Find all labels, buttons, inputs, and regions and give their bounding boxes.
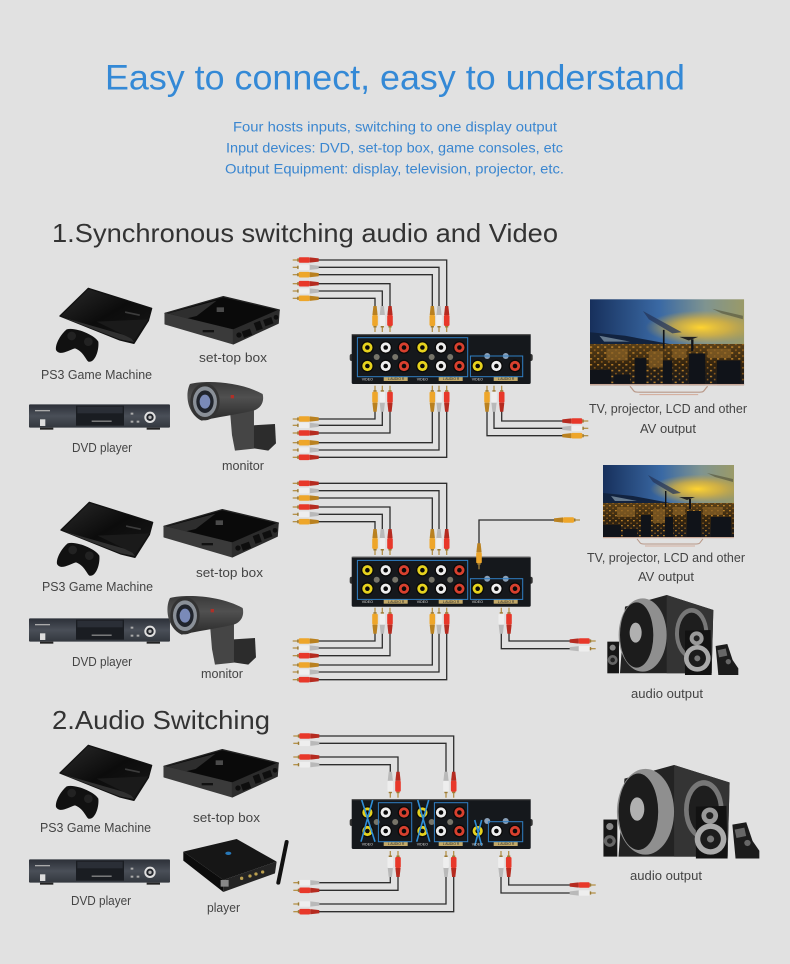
intro text	[225, 118, 564, 176]
switcher box 2: L AUDIO R	[443, 600, 460, 604]
switcher box 1: L AUDIO R	[388, 377, 405, 381]
device labels: player	[207, 900, 241, 915]
switcher box 3	[350, 799, 533, 849]
icon: speakers	[607, 595, 738, 675]
switcher box 2: VIDEO	[417, 600, 428, 604]
heading: section 2: 2.Audio Switching	[52, 705, 270, 735]
output label 2: TV, projector, LCD and other	[587, 550, 746, 565]
output: speakers 2	[607, 595, 738, 701]
output: TV 2	[587, 465, 746, 584]
input devices 2	[29, 502, 278, 681]
heading: section 1: 1.Synchronous switching audio and Video	[52, 218, 558, 248]
switcher box 2: L AUDIO R	[388, 600, 405, 604]
output: speakers 3	[603, 765, 759, 883]
label: audio output: audio output	[631, 686, 703, 701]
RCA plugs 3	[293, 733, 596, 914]
icon: monitor camera	[187, 382, 276, 451]
icon: PS3 game machine	[57, 502, 153, 576]
icon: television	[590, 299, 744, 395]
device labels: DVD player	[72, 440, 133, 455]
switcher box 3: L AUDIO R	[443, 842, 460, 846]
switcher box 3: VIDEO	[362, 842, 373, 846]
panel: diagram 3 audio switching	[29, 733, 759, 915]
device labels: monitor	[222, 458, 265, 473]
switcher box 3: L AUDIO R	[498, 842, 515, 846]
device labels: PS3 Game Machine	[41, 367, 152, 382]
RCA plugs 2	[293, 480, 596, 682]
switcher box 1: L AUDIO R	[498, 377, 515, 381]
output label 1: TV, projector, LCD and other	[589, 401, 748, 416]
label: audio output: audio output	[630, 868, 702, 883]
device labels: PS3 Game Machine	[40, 820, 151, 835]
icon: DVD player	[29, 618, 170, 644]
icon: media player	[183, 839, 287, 892]
icon: speakers	[603, 765, 759, 859]
device labels: DVD player	[72, 654, 133, 669]
switcher box 2	[350, 557, 533, 607]
cables 2	[316, 483, 572, 680]
title: Easy to connect, easy to understand	[105, 58, 685, 98]
device labels	[42, 565, 264, 681]
switcher box 1: VIDEO	[472, 378, 483, 382]
switcher box 1: VIDEO	[362, 378, 373, 382]
icon: set-top box	[164, 510, 278, 557]
switcher box 3: VIDEO	[417, 842, 428, 846]
output label 1	[589, 401, 748, 436]
output label 2	[587, 550, 746, 584]
device labels: set-top box	[196, 565, 264, 580]
icon: PS3 game machine	[56, 288, 152, 362]
switcher box 3: VIDEO	[472, 842, 483, 846]
intro text: Four hosts inputs, switching to one display output	[233, 118, 557, 134]
output: TV 1	[589, 299, 748, 436]
icon: television	[603, 465, 734, 546]
switcher box 1	[350, 334, 533, 384]
device labels	[41, 350, 268, 473]
device labels: set-top box	[199, 350, 268, 365]
output label 2: AV output	[638, 569, 694, 584]
device labels: set-top box	[193, 810, 261, 825]
device labels: PS3 Game Machine	[42, 579, 153, 594]
switcher box 1: L AUDIO R	[443, 377, 460, 381]
icon: PS3 game machine	[56, 745, 152, 819]
input devices 1	[29, 288, 279, 473]
icon: set-top box	[164, 750, 278, 797]
intro text: Output Equipment: display, television, projector, etc.	[225, 160, 564, 176]
output label 1: AV output	[640, 421, 696, 436]
icon: DVD player	[29, 859, 170, 885]
icon: set-top box	[165, 297, 279, 344]
device labels	[40, 810, 261, 915]
switcher box 1: VIDEO	[417, 378, 428, 382]
cables 3	[317, 736, 572, 912]
device labels: monitor	[201, 666, 244, 681]
icon: monitor camera	[167, 596, 256, 665]
switcher box 3: L AUDIO R	[388, 842, 405, 846]
switcher box 2: VIDEO	[362, 600, 373, 604]
cables 1	[316, 260, 565, 457]
input devices 3	[29, 745, 287, 915]
switcher box 2: VIDEO	[472, 600, 483, 604]
switcher box 2: L AUDIO R	[498, 600, 515, 604]
device labels: DVD player	[71, 893, 132, 908]
RCA plugs 1	[293, 257, 588, 460]
panel: diagram 2 split audio and video	[29, 465, 746, 701]
intro text: Input devices: DVD, set-top box, game consoles, etc	[226, 140, 563, 156]
panel: diagram 1 audio and video	[29, 257, 748, 473]
icon: DVD player	[29, 404, 170, 430]
